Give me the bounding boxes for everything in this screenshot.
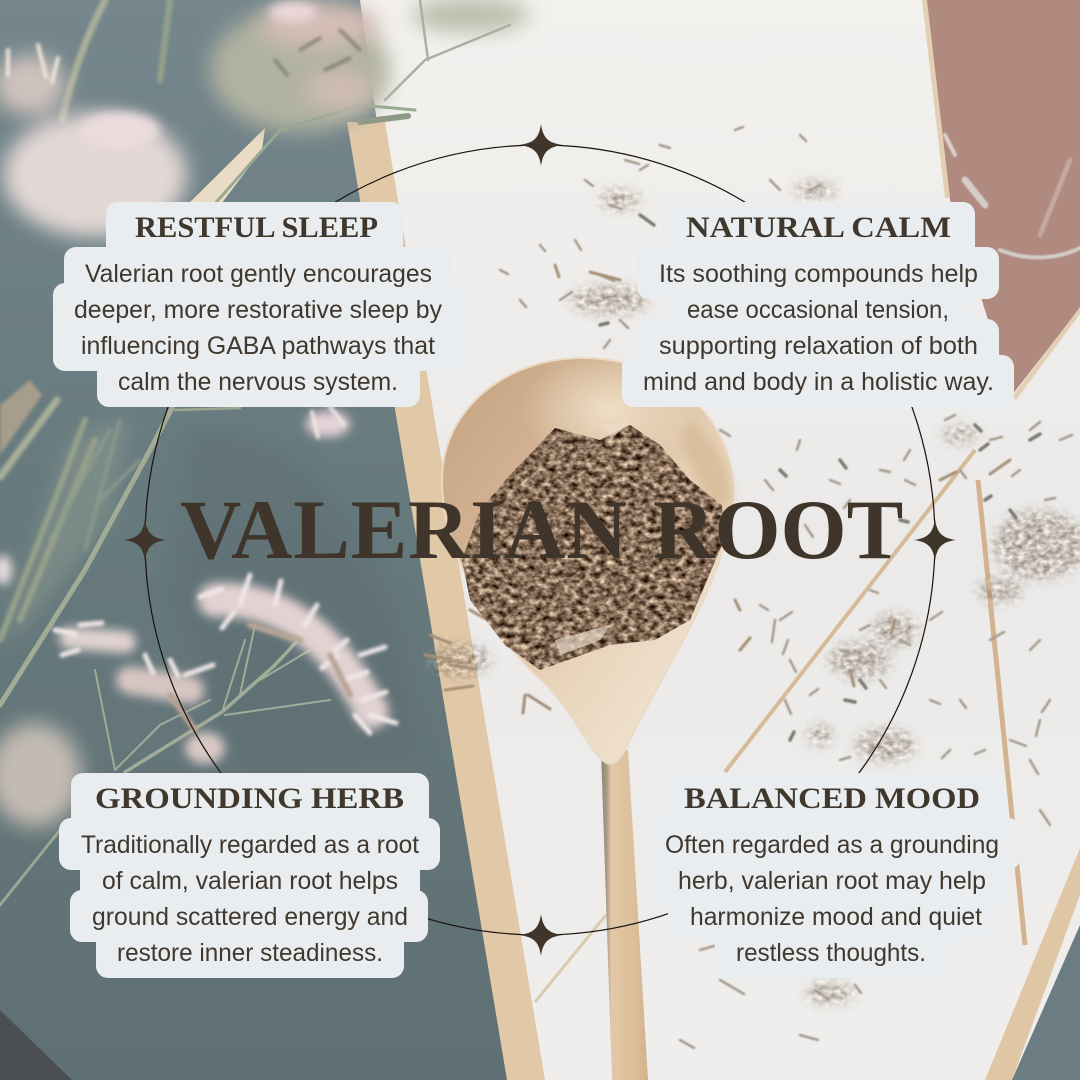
body text: grounding herb: restore inner steadiness. xyxy=(117,939,383,967)
body text: balanced mood: restless thoughts. xyxy=(736,939,926,967)
top-centre sprig mass xyxy=(410,0,530,33)
body text: grounding herb: Traditionally regarded as a root xyxy=(81,831,419,859)
body text: restful sleep: calm the nervous system. xyxy=(118,368,398,396)
body text: balanced mood: harmonize mood and quiet xyxy=(690,903,982,931)
panel background: grounding herb xyxy=(59,773,440,978)
body text: balanced mood: Often regarded as a grounding xyxy=(665,831,999,859)
star: bottom xyxy=(519,914,563,956)
bottom right corner xyxy=(985,848,1080,1080)
title: VALERIAN xyxy=(180,483,628,577)
foliage masses xyxy=(0,0,530,650)
top bouquet mass xyxy=(210,8,390,132)
star ornaments xyxy=(124,124,956,956)
wooden strip beside slate xyxy=(347,122,545,1080)
body text: balanced mood xyxy=(665,831,999,967)
heading: restful sleep: RESTFUL SLEEP xyxy=(135,211,378,244)
title: ROOT xyxy=(653,483,903,577)
panel: natural calm xyxy=(622,202,1014,407)
thin straws on marble xyxy=(725,450,975,772)
heading: natural calm: NATURAL CALM xyxy=(686,211,951,244)
star: top xyxy=(519,124,563,166)
body text: natural calm: supporting relaxation of both xyxy=(659,332,978,360)
decorative circle xyxy=(145,145,935,935)
flower clusters xyxy=(0,2,396,827)
red marble xyxy=(925,0,1080,395)
scattered herb flakes xyxy=(425,127,1072,1048)
heading: grounding herb: GROUNDING HERB xyxy=(95,782,404,815)
blossom masses xyxy=(0,3,380,827)
body text: natural calm: Its soothing compounds help xyxy=(659,260,978,288)
stems xyxy=(0,0,510,905)
panel background: natural calm xyxy=(622,202,1014,407)
panel: grounding herb xyxy=(59,773,440,978)
panel: restful sleep xyxy=(53,202,462,407)
blurred stems xyxy=(0,0,170,640)
panel background: restful sleep xyxy=(53,202,462,407)
panel background: balanced mood xyxy=(643,773,1020,978)
body text: restful sleep: deeper, more restorative sleep by xyxy=(74,296,442,324)
body text: natural calm: mind and body in a holistic way. xyxy=(643,368,994,396)
star: left xyxy=(124,519,166,561)
body text: natural calm xyxy=(643,260,994,396)
petal detail xyxy=(8,30,396,733)
body text: restful sleep xyxy=(74,260,442,396)
heading: balanced mood: BALANCED MOOD xyxy=(684,782,980,815)
slate board xyxy=(0,0,510,1080)
body text: restful sleep: influencing GABA pathways that xyxy=(81,332,435,360)
body text: grounding herb xyxy=(81,831,419,967)
star: right xyxy=(914,519,956,561)
herb heaps xyxy=(430,182,1080,1003)
body text: natural calm: ease occasional tension, xyxy=(687,296,949,324)
spoon bowl xyxy=(442,358,733,764)
panel: balanced mood xyxy=(643,773,1020,978)
tea mound xyxy=(462,422,724,670)
spoon handle xyxy=(601,750,648,1080)
body text: grounding herb: ground scattered energy and xyxy=(92,903,408,931)
body text: balanced mood: herb, valerian root may help xyxy=(678,867,986,895)
body text: restful sleep: Valerian root gently encourages xyxy=(85,260,432,288)
soft stem mass at left xyxy=(0,415,130,650)
body text: grounding herb: of calm, valerian root helps xyxy=(102,867,398,895)
